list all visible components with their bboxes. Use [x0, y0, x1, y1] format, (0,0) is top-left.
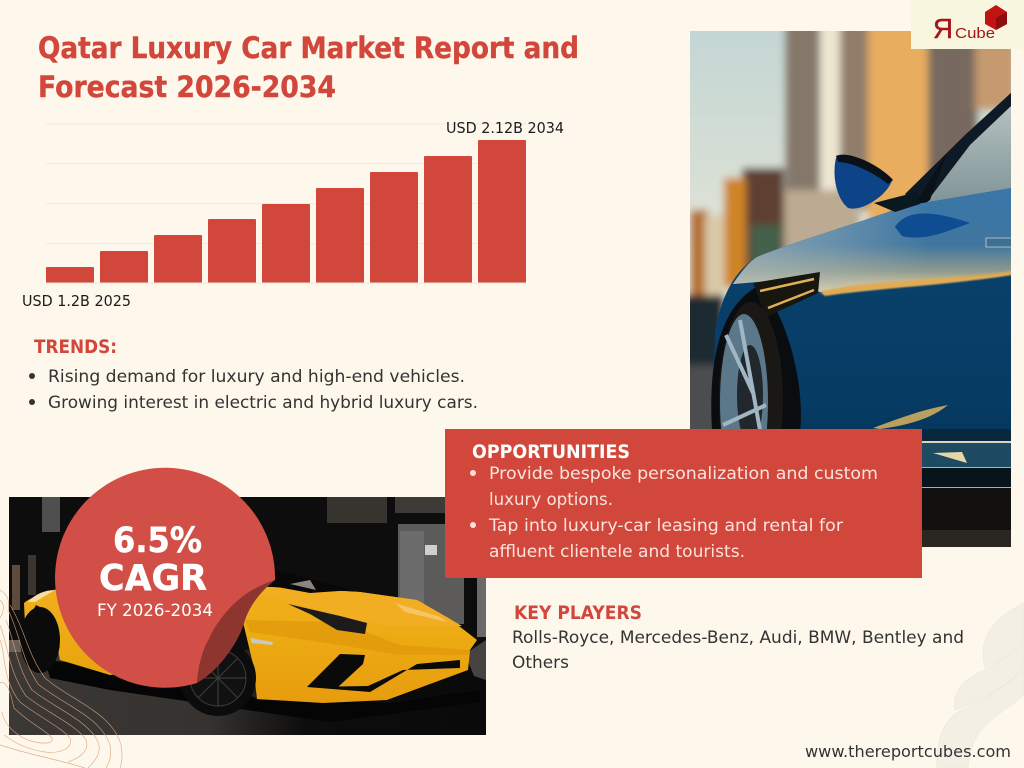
bumper shade	[245, 620, 470, 655]
chart label: 2025 value: USD 1.2B 2025	[22, 292, 131, 310]
decorative contour lines bottom left	[0, 590, 122, 768]
text: company names	[512, 628, 964, 673]
window glass	[926, 106, 1011, 202]
bar chart: market size growth	[46, 124, 526, 283]
peeled fold	[197, 580, 275, 683]
logo wordmark: Я	[933, 13, 953, 44]
rear wing light	[28, 590, 55, 602]
window frame	[905, 92, 1012, 206]
panel: opportunities	[445, 429, 922, 578]
photo backdrop: blurred buildings	[690, 31, 1011, 429]
CAGR badge	[55, 468, 275, 688]
decorative mesh wave bottom right	[937, 603, 1024, 768]
value: 6.5%	[113, 521, 202, 561]
title	[38, 31, 579, 104]
bullet list: trends: Growing interest in electric and hybrid luxury cars.	[48, 393, 478, 413]
door handle	[986, 238, 1012, 247]
headlight	[288, 604, 367, 634]
wheel arch	[711, 285, 801, 432]
cagr word: CAGR	[99, 558, 207, 599]
front wheel	[188, 642, 256, 716]
fender vent	[753, 272, 820, 317]
heading: key players: KEY PLAYERS	[514, 602, 642, 624]
website url: www.thereportcubes.com	[805, 742, 1011, 761]
door shadow	[895, 214, 970, 238]
tyre and rim	[719, 302, 783, 429]
front intakes	[307, 654, 365, 687]
bullet list: opportunities: affluent clientele and tourists.	[489, 542, 745, 562]
gold reflection strip	[820, 271, 1012, 296]
title: Forecast 2026-2034	[38, 70, 336, 104]
panel: trends	[29, 336, 478, 413]
photo: yellow sports car	[9, 497, 487, 735]
photo: blue luxury car	[690, 31, 1011, 547]
side marker	[250, 638, 273, 645]
logo wordmark	[933, 13, 995, 44]
bullet list: trends	[29, 367, 478, 413]
car body	[24, 578, 477, 703]
text: company names: Rolls-Royce, Mercedes-Benz, Audi, BMW, Bentley and	[512, 628, 964, 648]
windscreen	[278, 587, 342, 593]
bullet list: opportunities: Tap into luxury-car leasing and rental for	[488, 516, 843, 536]
lower body bands	[922, 429, 1012, 547]
road	[9, 650, 285, 735]
side mirror	[834, 158, 892, 209]
hood highlight	[270, 587, 462, 626]
rear wheel	[20, 607, 60, 673]
logo	[911, 0, 1024, 49]
bullet list: trends: Rising demand for luxury and high-end vehicles.	[48, 367, 465, 387]
title: Qatar Luxury Car Market Report and	[38, 31, 579, 65]
chart label: 2034 value: USD 2.12B 2034	[446, 119, 564, 137]
logo wordmark: Cube	[955, 25, 995, 42]
upper body reflection	[733, 188, 1012, 292]
period: FY 2026-2034	[97, 601, 213, 621]
badge circle with peeled corner	[55, 468, 275, 688]
bullet list: opportunities	[470, 464, 878, 562]
heading: trends: TRENDS:	[34, 336, 117, 358]
car body	[714, 188, 1011, 429]
heading: opportunities: OPPORTUNITIES	[472, 441, 630, 463]
street background	[9, 497, 486, 650]
bullet list: opportunities: luxury options.	[489, 490, 613, 510]
panel: key players	[512, 602, 964, 673]
sill reflection	[873, 405, 948, 429]
car underside shadow	[48, 661, 387, 722]
text: company names: Others	[512, 653, 569, 673]
window pillar	[918, 154, 946, 204]
lower lip	[387, 696, 398, 700]
icon: red cube	[985, 5, 1007, 30]
bullet list: opportunities: Provide bespoke personalization and custom	[489, 464, 878, 484]
